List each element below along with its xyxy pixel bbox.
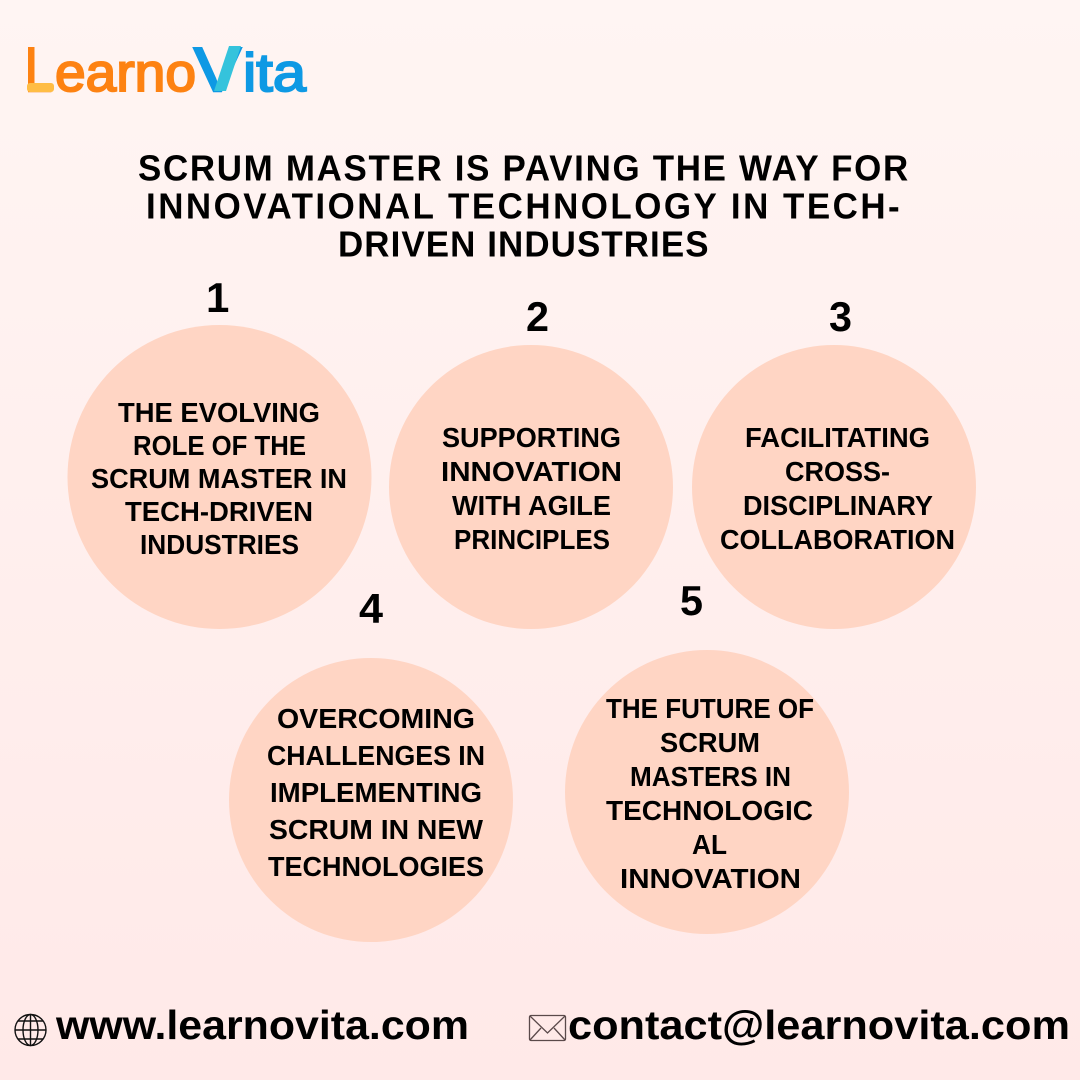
item 5: future of scrum masters: SCRUM: [660, 727, 760, 758]
item 1: evolving role: TECH-DRIVEN: [125, 496, 313, 527]
item 3: cross-disciplinary collaboration: CROSS-: [785, 456, 890, 487]
item 5: future of scrum masters: TECHNOLOGIC: [606, 795, 813, 826]
item 4: overcoming challenges: OVERCOMING: [277, 703, 475, 734]
item 5: future of scrum masters: INNOVATION: [620, 863, 801, 894]
item 5: future of scrum masters: 5: [680, 577, 703, 624]
item 3: cross-disciplinary collaboration: DISCIPLINARY: [743, 490, 933, 521]
item 4: overcoming challenges: 4: [359, 585, 384, 632]
item 3: cross-disciplinary collaboration: FACILITATING: [745, 422, 930, 453]
item 3: cross-disciplinary collaboration: COLLABORATION: [720, 524, 955, 555]
item 2: supporting innovation: [389, 293, 673, 629]
item 1: evolving role: ROLE OF THE: [133, 430, 306, 461]
title: SCRUM MASTER IS PAVING THE WAY FOR: [138, 148, 908, 189]
icon: envelope: [530, 1016, 566, 1040]
item 5: future of scrum masters: [565, 577, 849, 934]
item 3: cross-disciplinary collaboration: [692, 293, 976, 629]
item 4: overcoming challenges: [229, 585, 513, 942]
item 1: evolving role: INDUSTRIES: [140, 529, 299, 560]
item 5: future of scrum masters: THE FUTURE OF: [606, 693, 814, 724]
item 1: evolving role: SCRUM MASTER IN: [91, 463, 347, 494]
item 2: supporting innovation: WITH AGILE: [452, 490, 611, 521]
item 2: supporting innovation: PRINCIPLES: [454, 524, 610, 555]
item 4: overcoming challenges: CHALLENGES IN: [267, 740, 485, 771]
logo: LearnoVita: ita: [243, 43, 307, 103]
website address: www.learnovita.com: [55, 1002, 469, 1048]
item 2: supporting innovation: SUPPORTING: [442, 422, 621, 453]
item 1: evolving role: [68, 274, 372, 629]
item 4: overcoming challenges: IMPLEMENTING: [270, 777, 482, 808]
logo: LearnoVita: earno: [55, 43, 196, 103]
item 5: future of scrum masters: AL: [692, 829, 727, 860]
email address: contact@learnovita.com: [568, 1002, 1070, 1048]
icon: globe: [15, 1014, 46, 1046]
logo: LearnoVita: [25, 36, 307, 105]
item 2: supporting innovation: INNOVATION: [441, 456, 622, 487]
title: DRIVEN INDUSTRIES: [338, 224, 709, 265]
item 1: evolving role: 1: [206, 274, 229, 321]
item 4: overcoming challenges: TECHNOLOGIES: [268, 851, 484, 882]
logo: LearnoVita: V: [194, 36, 242, 105]
title: [138, 148, 908, 265]
logo: LearnoVita: L: [25, 36, 52, 105]
item 2: supporting innovation: 2: [526, 293, 549, 340]
item 1: evolving role: THE EVOLVING: [118, 397, 320, 428]
item 3: cross-disciplinary collaboration: 3: [829, 293, 852, 340]
title: INNOVATIONAL TECHNOLOGY IN TECH-: [146, 186, 900, 227]
item 4: overcoming challenges: SCRUM IN NEW: [269, 814, 484, 845]
item 5: future of scrum masters: MASTERS IN: [630, 761, 791, 792]
